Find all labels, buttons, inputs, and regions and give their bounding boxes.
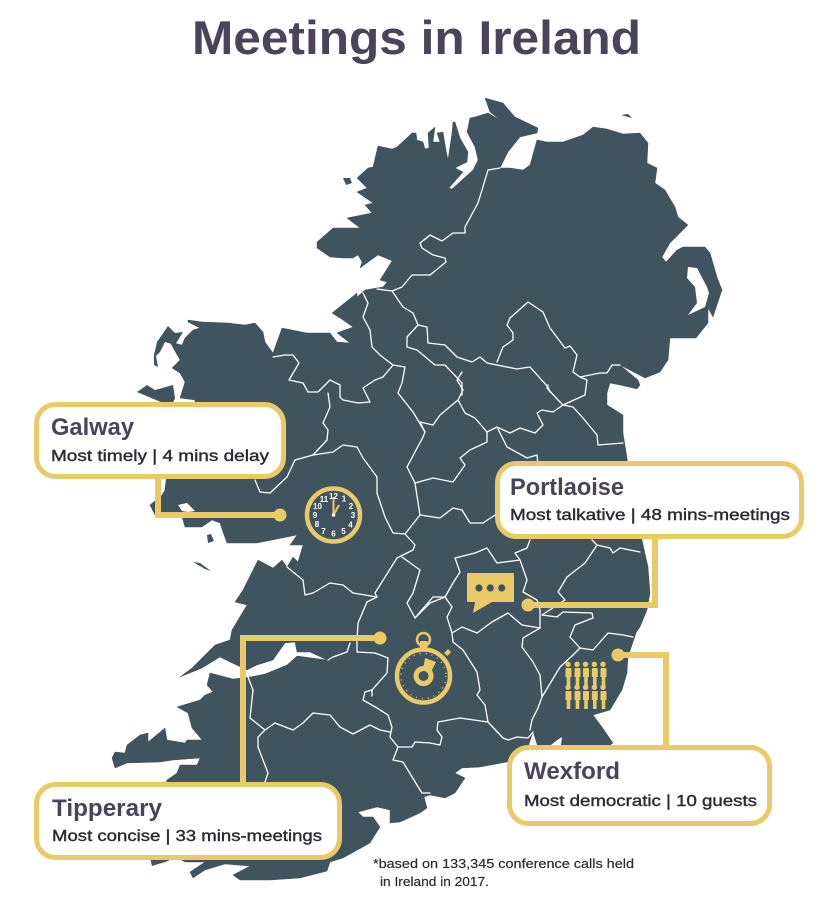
connector: Galway — [158, 476, 286, 522]
text: Portlaoise stat: Most talkative | 48 mins-meetings — [510, 507, 790, 524]
icon: clock: 1 — [342, 494, 347, 504]
icon: clock: 6 — [331, 530, 336, 538]
callout: Portlaoise — [498, 464, 802, 536]
heading: Tipperary: Tipperary — [52, 795, 163, 822]
callout: Galway — [36, 404, 284, 476]
icon: clock: 10 — [313, 502, 322, 511]
icon: clock: 3 — [351, 511, 356, 520]
icon: clock: 12 — [329, 492, 338, 501]
connector: Portlaoise — [522, 537, 655, 612]
icon: clock: 9 — [313, 511, 318, 520]
heading: Wexford: Wexford — [524, 758, 620, 785]
icon: clock: 2 — [349, 502, 354, 511]
connector: Wexford — [612, 648, 666, 747]
title: Meetings in Ireland — [192, 11, 641, 64]
icon: speech bubble — [467, 573, 514, 613]
connector: Tipperary — [243, 632, 386, 785]
icon: clock: 7 — [321, 527, 326, 536]
text: Tipperary stat: Most concise | 33 mins-meetings — [52, 828, 322, 845]
icon: clock: 11 — [320, 495, 329, 504]
footnote — [373, 856, 634, 889]
heading: Galway: Galway — [51, 414, 135, 441]
icon: ten people — [565, 662, 606, 709]
icon: clock — [307, 488, 360, 542]
icon: clock: 4 — [348, 520, 353, 530]
footnote: in Ireland in 2017. — [380, 874, 489, 889]
heading: Portlaoise: Portlaoise — [510, 474, 624, 501]
callout: Tipperary — [36, 784, 340, 858]
icon: clock: 5 — [341, 527, 346, 536]
icon: clock: 8 — [315, 520, 320, 529]
icon: stopwatch — [397, 633, 451, 702]
county borders — [248, 168, 640, 793]
text: Wexford stat: Most democratic | 10 guests — [524, 793, 757, 810]
callout: Wexford — [510, 748, 770, 824]
text: Galway stat: Most timely | 4 mins delay — [51, 448, 269, 465]
map of Ireland — [112, 98, 722, 880]
footnote: *based on 133,345 conference calls held — [373, 856, 634, 871]
